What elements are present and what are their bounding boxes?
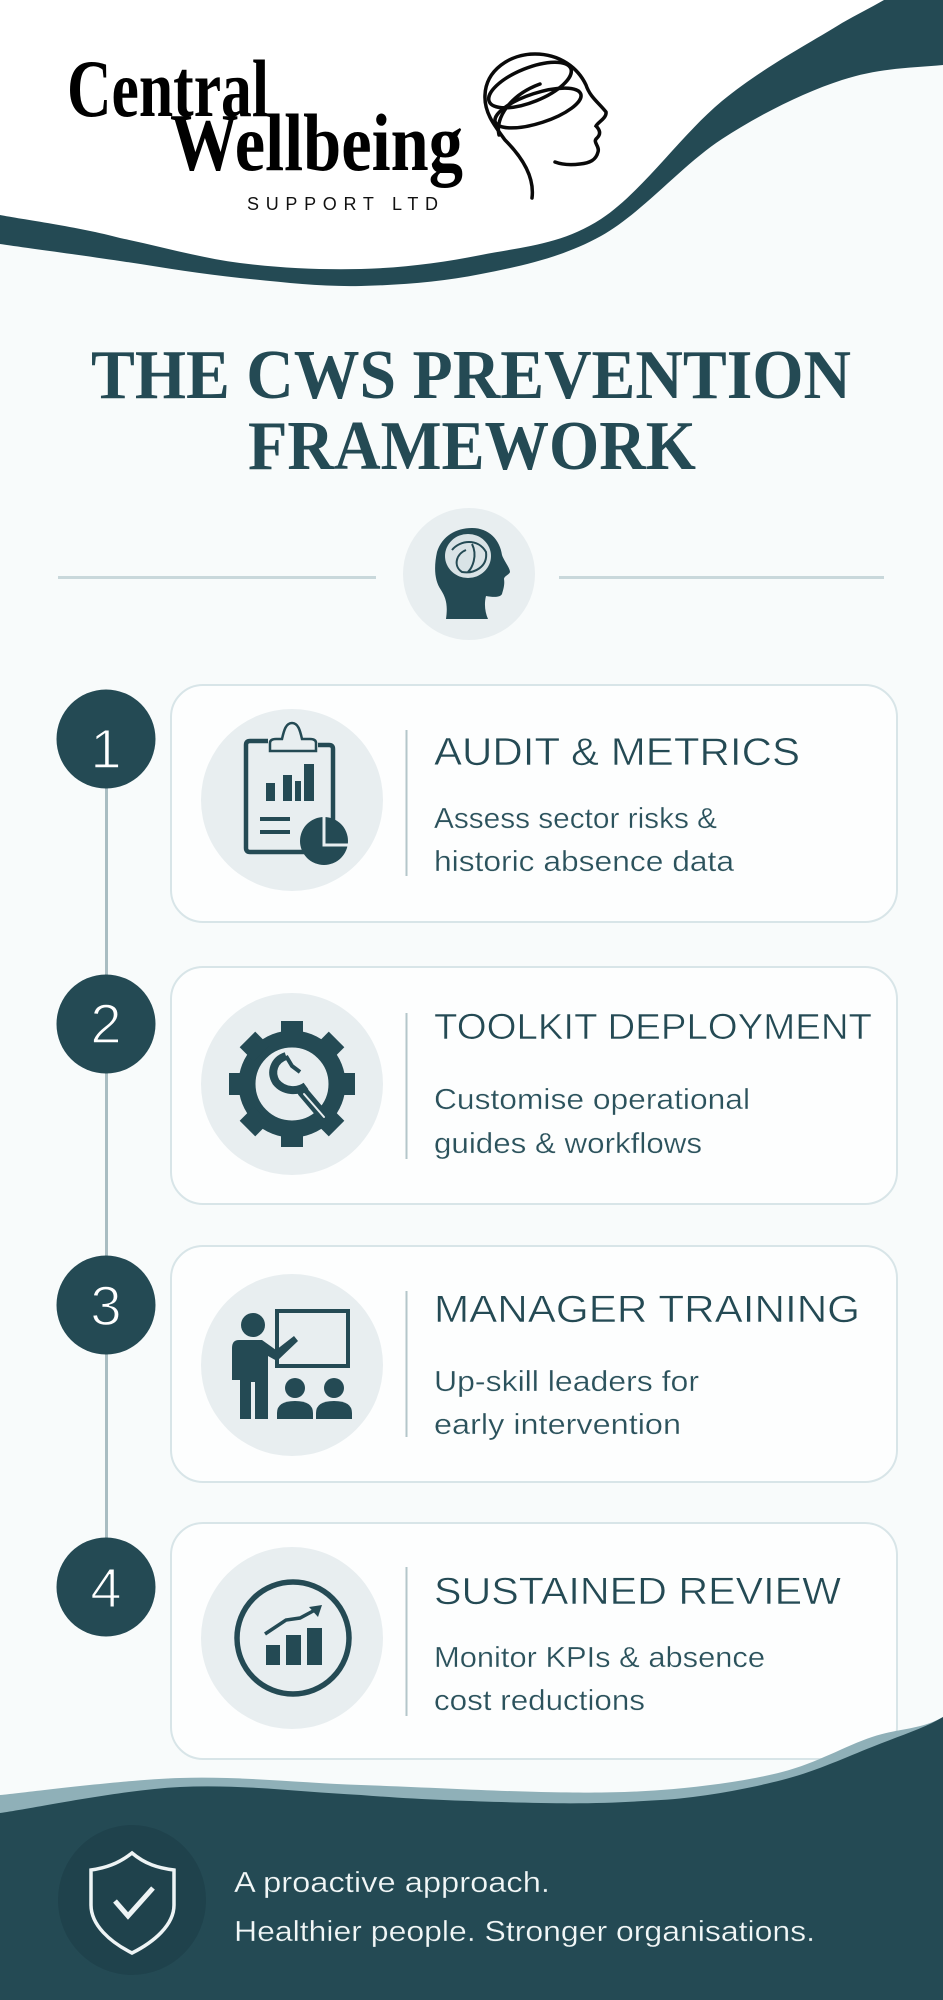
heading: SUSTAINED REVIEW <box>434 1571 841 1613</box>
title: THE CWS PREVENTION <box>91 337 851 414</box>
number badge 2 <box>56 974 156 1074</box>
title <box>91 337 851 485</box>
divider rule <box>406 1013 408 1159</box>
panel: audit and metrics <box>171 685 897 922</box>
description: Monitor KPIs & absence <box>434 1642 765 1674</box>
description <box>434 1642 765 1717</box>
description: Customise operational <box>434 1084 750 1116</box>
footer band <box>0 1717 943 2000</box>
footer message <box>234 1867 815 1948</box>
icon: head with brain <box>435 528 510 619</box>
description: early intervention <box>434 1409 681 1441</box>
description: Assess sector risks & <box>434 803 717 835</box>
divider rule <box>406 1291 408 1437</box>
icon: gear and wrench <box>201 993 383 1175</box>
footer light wave <box>0 1717 943 1830</box>
description: cost reductions <box>434 1685 645 1717</box>
number badge 2: 2 <box>90 992 122 1055</box>
footer message: Healthier people. Stronger organisations. <box>234 1916 815 1948</box>
heading: MANAGER TRAINING <box>434 1289 860 1331</box>
divider rule <box>406 730 408 876</box>
footer message: A proactive approach. <box>234 1867 550 1899</box>
header wave band <box>0 0 943 286</box>
number badge 1 <box>56 690 156 788</box>
icon: growth chart in ring <box>201 1547 383 1729</box>
icon: trainer and audience <box>201 1274 383 1456</box>
icon: line-art head <box>483 53 606 198</box>
divider with head icon <box>58 508 884 640</box>
number badge 4 <box>56 1538 156 1636</box>
header white area <box>0 0 943 286</box>
description: Up-skill leaders for <box>434 1366 699 1398</box>
step 1 <box>56 685 897 922</box>
logo wordmark: Central: Central <box>67 43 269 134</box>
divider rule <box>406 1567 408 1716</box>
title: FRAMEWORK <box>248 408 696 485</box>
heading: AUDIT & METRICS <box>434 731 800 774</box>
panel: toolkit deployment <box>171 967 897 1204</box>
step 3 <box>56 1246 897 1482</box>
number badge 3 <box>56 1256 156 1354</box>
logo tagline: SUPPORT LTD <box>247 194 438 214</box>
footer dark panel <box>0 1717 943 2000</box>
number badge 1: 1 <box>90 717 122 780</box>
number badge 3: 3 <box>90 1274 122 1337</box>
heading: TOOLKIT DEPLOYMENT <box>434 1006 872 1047</box>
step 2 <box>56 967 897 1204</box>
description <box>434 1084 750 1160</box>
timeline connector <box>105 739 108 1587</box>
step 4 <box>56 1523 897 1759</box>
panel: manager training <box>171 1246 897 1482</box>
description <box>434 803 735 878</box>
description: guides & workflows <box>434 1128 702 1160</box>
logo <box>67 43 606 214</box>
description: historic absence data <box>434 846 735 878</box>
panel: sustained review <box>171 1523 897 1759</box>
description <box>434 1366 699 1441</box>
icon: clipboard <box>201 709 383 891</box>
icon: shield with check <box>58 1825 206 1975</box>
number badge 4: 4 <box>90 1556 122 1619</box>
logo wordmark: Wellbeing: Wellbeing <box>170 97 463 188</box>
